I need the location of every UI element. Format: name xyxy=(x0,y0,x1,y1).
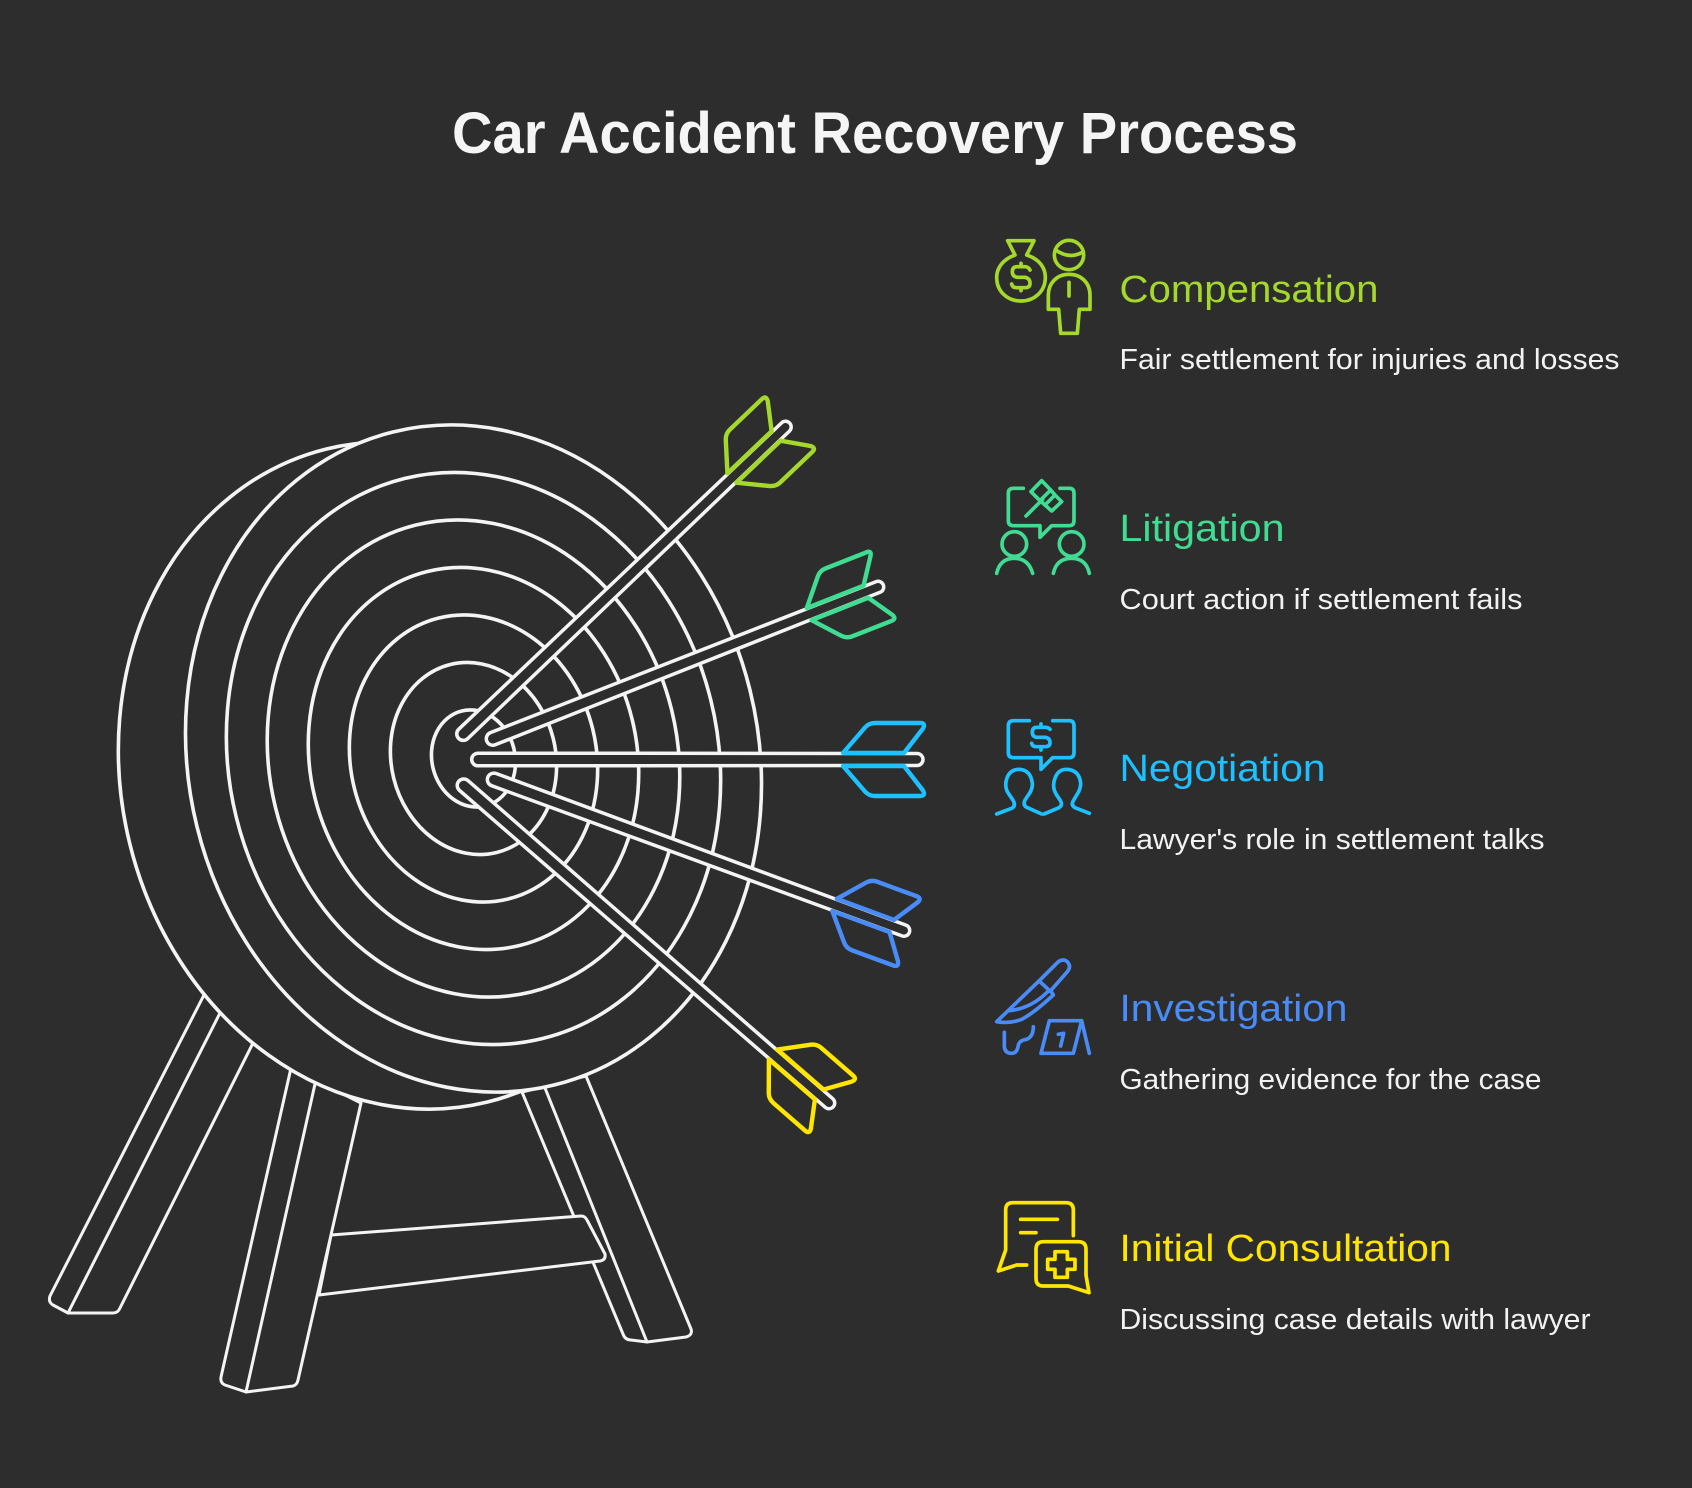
stand: middle leg xyxy=(221,1068,361,1392)
icon: gavel speech bubble with two people xyxy=(997,481,1089,573)
description: initial consultation: Discussing case details with lawyer xyxy=(1120,1304,1591,1336)
stand: crossbar xyxy=(319,1216,605,1295)
description: litigation: Court action if settlement fails xyxy=(1120,584,1522,616)
heading: litigation: Litigation xyxy=(1120,508,1284,550)
stand: left leg xyxy=(49,993,254,1313)
description: investigation: Gathering evidence for the case xyxy=(1120,1064,1542,1096)
arrow: investigation xyxy=(475,743,922,967)
heading: negotiation: Negotiation xyxy=(1120,748,1326,790)
heading: initial consultation: Initial Consultation xyxy=(1120,1228,1452,1270)
description: negotiation: Lawyer's role in settlement talks xyxy=(1120,824,1544,856)
icon: knife and evidence marker xyxy=(997,960,1089,1053)
target rings xyxy=(116,364,831,1153)
heading: compensation: Compensation xyxy=(1120,269,1378,311)
title: Car Accident Recovery Process xyxy=(452,101,1298,166)
description: compensation: Fair settlement for injuries and losses xyxy=(1120,344,1620,376)
stand: right leg xyxy=(522,1076,691,1342)
arrow: litigation xyxy=(473,551,897,775)
heading: investigation: Investigation xyxy=(1120,988,1348,1030)
icon: medical consultation speech bubbles xyxy=(998,1203,1089,1293)
arrow: initial consultation xyxy=(435,754,857,1134)
arrow: compensation xyxy=(433,396,815,765)
icon: dollar speech bubble with two people xyxy=(997,721,1089,814)
icon: money bag and person xyxy=(997,240,1090,333)
target back edge xyxy=(49,381,765,1170)
target illustration xyxy=(49,364,924,1392)
arrow: negotiation xyxy=(472,723,924,796)
